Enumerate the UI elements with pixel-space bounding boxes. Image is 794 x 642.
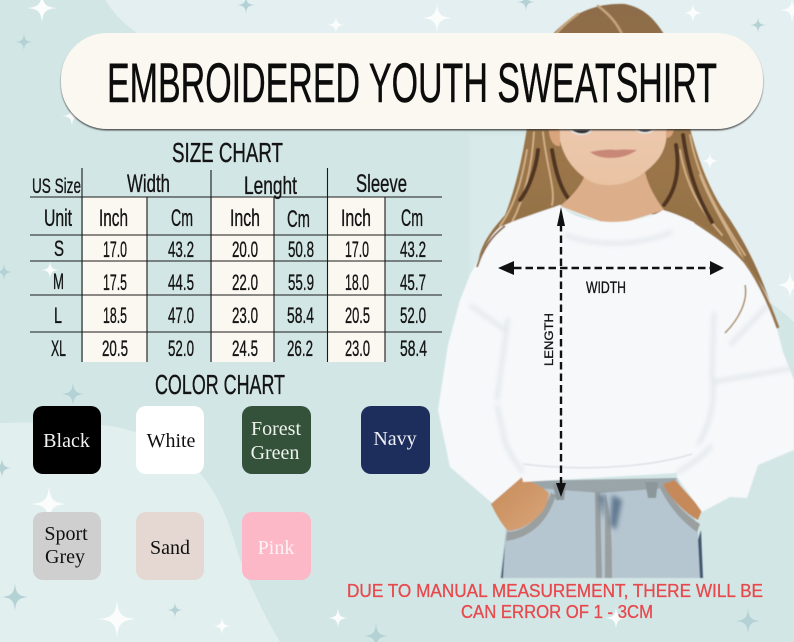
jean seams and shading: [506, 486, 700, 578]
color chart swatches: [33, 406, 430, 580]
unit row: [44, 205, 423, 233]
swatch: sand: Sand: [150, 537, 190, 559]
unit row: Cm: [287, 206, 310, 233]
row L: 23.0: [232, 303, 258, 328]
unit row: Inch: [230, 205, 260, 232]
swatch: pink: Pink: [258, 537, 294, 559]
row XL: XL: [51, 336, 66, 361]
width measurement arrow: [498, 261, 724, 297]
row XL: [51, 336, 427, 361]
cream columns: [83, 197, 385, 362]
ears: [549, 130, 674, 146]
row L: 18.5: [103, 303, 127, 328]
row L: 47.0: [168, 303, 194, 328]
swatch: sand: [136, 512, 204, 580]
face: [558, 128, 667, 185]
swatch: sport grey: Grey: [45, 546, 85, 568]
row M: 55.9: [288, 270, 314, 295]
color chart heading: COLOR CHART: [155, 369, 285, 400]
lips: [590, 150, 637, 158]
swatch: white: White: [147, 430, 196, 452]
row L: L: [54, 303, 62, 328]
swatch: forest green: Green: [251, 442, 299, 464]
row L: 20.5: [345, 303, 370, 328]
row XL: 26.2: [287, 336, 313, 361]
row S: S: [54, 236, 64, 261]
swatch: pink: [242, 512, 311, 580]
table header row: [32, 170, 407, 200]
row S: 43.2: [168, 237, 194, 262]
measurement disclaimer: [347, 581, 763, 622]
swatch: navy: [361, 406, 430, 474]
swatch: black: [33, 406, 101, 474]
row XL: 24.5: [232, 336, 258, 361]
unit row: Cm: [401, 205, 423, 232]
swatch: black: Black: [43, 430, 90, 452]
size chart heading: SIZE CHART: [172, 137, 283, 168]
row XL: 58.4: [400, 336, 427, 361]
photo: child wearing white sweatshirt and jeans: [438, 4, 794, 578]
row M: 18.0: [345, 270, 369, 295]
length label: LENGTH: [542, 313, 556, 366]
row XL: 20.5: [102, 336, 128, 361]
row S: 43.2: [400, 237, 426, 262]
length measurement arrow: [542, 207, 566, 497]
jeans: [500, 478, 703, 578]
row L: [54, 303, 426, 328]
size chart table: [30, 168, 442, 362]
unit row: Inch: [341, 205, 371, 232]
swatch: sport grey: Sport: [44, 523, 88, 545]
unit row: Unit: [44, 205, 72, 232]
row M: 45.7: [400, 270, 426, 295]
table header row: Sleeve: [356, 170, 407, 198]
swatch: navy: Navy: [373, 428, 417, 450]
waistband: [523, 478, 677, 493]
swatch: sport grey: [33, 512, 101, 580]
swatch: white: [136, 406, 204, 474]
title banner: [61, 33, 763, 129]
unit row: Inch: [99, 205, 128, 232]
row M: 17.5: [103, 270, 127, 295]
table header row: Width: [127, 170, 170, 198]
row S: 20.0: [232, 237, 258, 262]
row L: 58.4: [287, 303, 314, 328]
row XL: 23.0: [345, 336, 370, 361]
sweatshirt: [438, 205, 794, 512]
row S: 50.8: [288, 237, 314, 262]
swatch: forest green: [242, 406, 311, 474]
table header row: US Size: [32, 175, 81, 198]
swatch: forest green: Forest: [251, 418, 301, 440]
width label: WIDTH: [586, 278, 626, 297]
row L: 52.0: [400, 303, 426, 328]
row M: 22.0: [232, 270, 258, 295]
hair strands over shirt: [695, 222, 778, 328]
row XL: 52.0: [168, 336, 194, 361]
table header row: Lenght: [244, 172, 297, 200]
row S: 17.0: [103, 237, 127, 262]
measurement disclaimer: CAN ERROR OF 1 - 3CM: [461, 602, 653, 622]
row M: 44.5: [168, 270, 194, 295]
hands: [491, 477, 549, 531]
neck: [560, 172, 664, 226]
row S: [54, 236, 426, 262]
row M: M: [53, 269, 64, 294]
measurement disclaimer: DUE TO MANUAL MEASUREMENT, THERE WILL BE: [347, 581, 763, 601]
sweatshirt folds: [470, 232, 794, 473]
sunglasses: [570, 129, 654, 134]
unit row: Cm: [171, 205, 193, 232]
row S: 17.0: [345, 237, 369, 262]
hair: [477, 4, 778, 328]
row M: [53, 269, 426, 295]
